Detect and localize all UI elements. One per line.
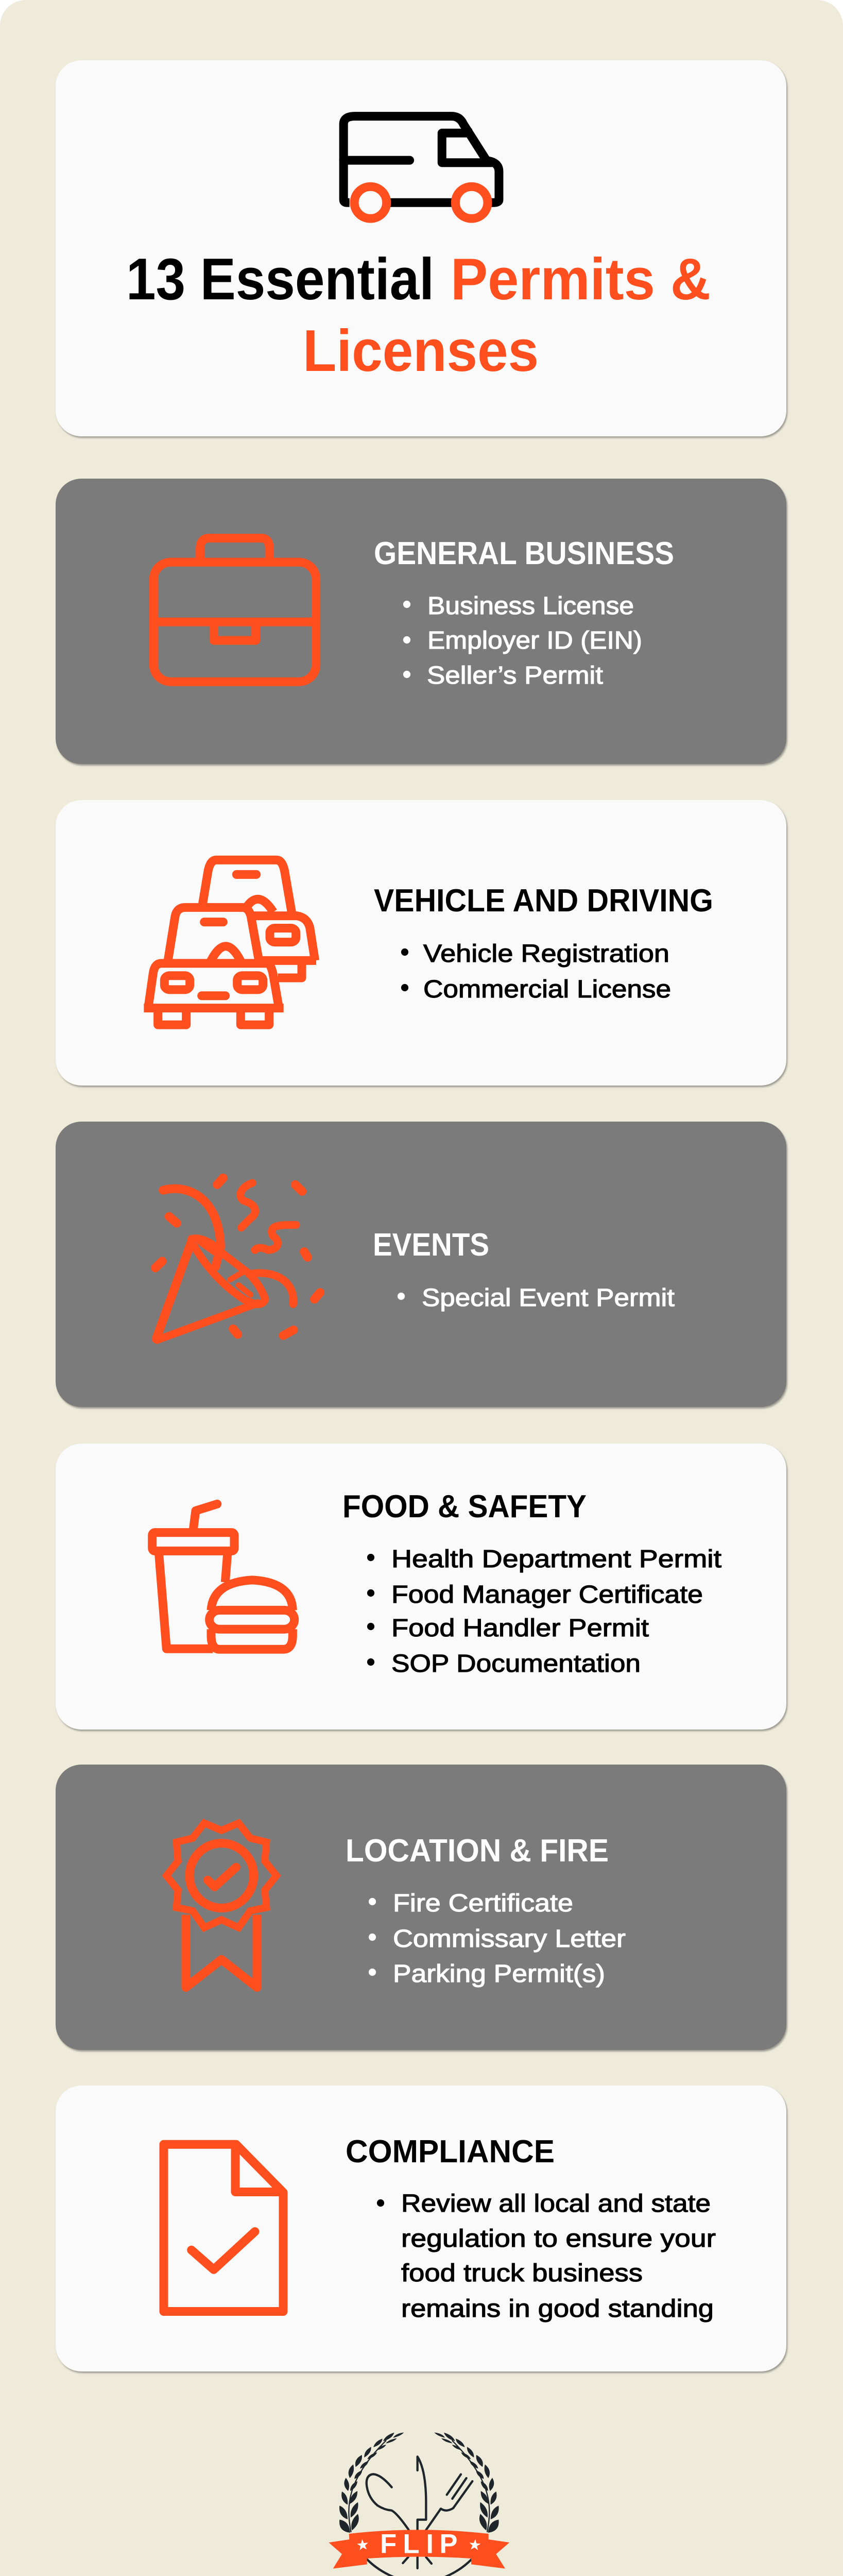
icon: checked document bbox=[164, 2144, 283, 2312]
list: food permits: Food Manager Certificate bbox=[391, 1581, 703, 1608]
list: general business permits: Business License bbox=[427, 592, 634, 620]
list: location permits: Fire Certificate bbox=[393, 1890, 573, 1917]
list: compliance note: remains in good standing bbox=[401, 2295, 714, 2323]
icon: cars bbox=[144, 860, 316, 1025]
heading: title bbox=[126, 247, 711, 384]
list: food permits: Food Handler Permit bbox=[391, 1615, 649, 1642]
ribbon banner bbox=[329, 2530, 509, 2569]
heading: compliance: COMPLIANCE bbox=[346, 2134, 555, 2170]
panel: compliance bbox=[56, 2086, 786, 2371]
list: compliance note: regulation to ensure your bbox=[401, 2225, 716, 2252]
list: general business permits bbox=[404, 592, 642, 689]
panel: vehicle and driving bbox=[56, 800, 786, 1086]
panel: location and fire bbox=[56, 1765, 786, 2050]
logo: FLIP bbox=[329, 2432, 509, 2576]
panel: events bbox=[56, 1122, 786, 1407]
list: location permits bbox=[369, 1890, 626, 1988]
icon: award ribbon bbox=[166, 1823, 277, 1987]
list: food permits: SOP Documentation bbox=[391, 1650, 641, 1677]
panel: general business bbox=[56, 479, 786, 764]
heading: food and safety: FOOD & SAFETY bbox=[342, 1489, 587, 1524]
list: general business permits: Seller’s Permit bbox=[427, 662, 603, 689]
heading: vehicle and driving: VEHICLE AND DRIVING bbox=[374, 883, 713, 919]
heading: location and fire: LOCATION & FIRE bbox=[346, 1833, 609, 1869]
list: vehicle permits: Commercial License bbox=[423, 976, 671, 1003]
panel: title bbox=[56, 60, 786, 436]
panel: food and safety bbox=[56, 1444, 786, 1730]
list: food permits bbox=[368, 1546, 721, 1677]
icon: party popper bbox=[156, 1178, 320, 1340]
list: compliance note bbox=[377, 2190, 716, 2323]
list: vehicle permits: Vehicle Registration bbox=[423, 940, 669, 968]
heading: events: EVENTS bbox=[373, 1227, 489, 1263]
icon: spoon, knife and fork bbox=[367, 2456, 472, 2576]
list: compliance note: Review all local and state bbox=[401, 2190, 711, 2217]
list: event permits: Special Event Permit bbox=[422, 1284, 675, 1312]
icon: laurel wreath bbox=[339, 2432, 499, 2533]
list: location permits: Parking Permit(s) bbox=[393, 1960, 605, 1988]
heading: title: 13 Essential bbox=[126, 247, 434, 312]
list: food permits: Health Department Permit bbox=[391, 1546, 721, 1573]
logo wordmark: FLIP bbox=[380, 2529, 457, 2560]
heading: title: Permits & bbox=[451, 247, 711, 312]
list: general business permits: Employer ID (EIN) bbox=[427, 627, 642, 654]
list: compliance note: food truck business bbox=[401, 2260, 643, 2287]
icon: drink and burger bbox=[152, 1504, 295, 1649]
heading: general business: GENERAL BUSINESS bbox=[374, 536, 674, 571]
icon: briefcase bbox=[153, 538, 316, 682]
ribbon stars bbox=[356, 2538, 481, 2550]
heading: title: Licenses bbox=[303, 318, 539, 384]
list: vehicle permits bbox=[402, 940, 671, 1003]
icon: food truck bbox=[343, 116, 499, 218]
list: location permits: Commissary Letter bbox=[393, 1925, 626, 1953]
